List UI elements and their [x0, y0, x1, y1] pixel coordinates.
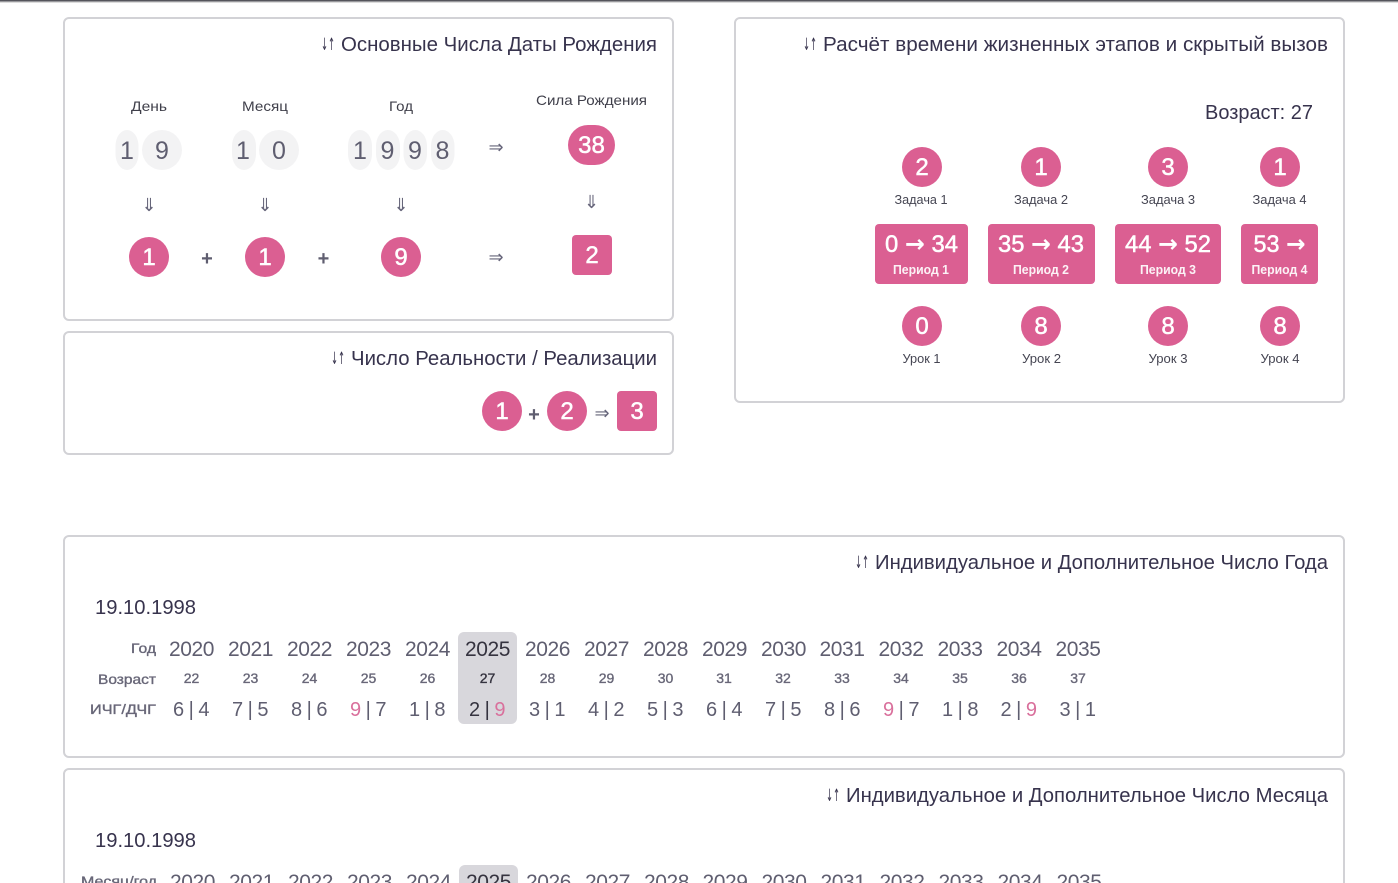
arrows: down: ⇓	[141, 195, 157, 216]
row: years: 2029	[702, 638, 747, 661]
row: years: 2034	[997, 638, 1042, 661]
row: years: 2025	[465, 638, 510, 661]
arrows: down: ⇓	[584, 192, 599, 213]
row: personal and additional year numbers: 6 | 4	[173, 699, 209, 721]
badge: result 3	[617, 391, 657, 431]
heading: basic birth date numbers: Основные Числа Даты Рождения	[341, 34, 657, 56]
badge: result 2	[572, 235, 612, 275]
row: years: 2021	[228, 638, 273, 661]
column labels: Сила Рождения	[536, 92, 647, 108]
row: years: 2024	[405, 638, 451, 661]
month digits: 0	[272, 137, 286, 165]
row: ages: 23	[243, 670, 258, 686]
badge: birth force 38: 38	[578, 132, 605, 159]
stage 3	[1115, 147, 1221, 366]
stage 3: Урок 3	[1148, 351, 1188, 366]
row: years: 2031	[820, 638, 864, 661]
panel: life stages and hidden challenge	[735, 18, 1344, 402]
year digits: 1	[353, 137, 367, 165]
row: ages: 35	[952, 670, 968, 686]
panel: basic birth date numbers	[64, 18, 673, 320]
row: ages: 30	[658, 670, 673, 686]
row: personal and additional year numbers: 3 | 1	[1059, 699, 1096, 721]
badge: birth force 38	[568, 125, 615, 165]
arrows: down: ⇓	[257, 195, 273, 216]
stage 1: Период 1	[893, 263, 949, 277]
row: personal and additional year numbers: 9 | 7	[350, 699, 386, 721]
year digits: 8	[436, 137, 449, 165]
arrows: down: ⇓	[393, 195, 409, 216]
badge: month reduced 1	[245, 237, 285, 277]
stage 2: Урок 2	[1022, 351, 1061, 366]
row: years: 2023	[346, 638, 391, 661]
column labels: Год	[389, 98, 413, 114]
stage 1: 2	[915, 154, 929, 181]
panel: reality number	[64, 332, 673, 454]
row: personal and additional year numbers: 7 | 5	[765, 699, 801, 721]
stage 3: 8	[1161, 313, 1175, 340]
stage 4: Задача 4	[1252, 192, 1306, 207]
heading: reality number: Число Реальности / Реализации	[351, 348, 657, 370]
heading: year number: Индивидуальное и Дополнительное Число Года	[875, 552, 1329, 574]
heading: life stages: ↓↑	[803, 35, 817, 55]
stage 2: Задача 2	[1014, 192, 1068, 207]
row: personal and additional year numbers: 4 | 2	[588, 699, 624, 721]
current year highlight	[459, 865, 518, 883]
heading: life stages: Расчёт времени жизненных этапов и скрытый вызов	[823, 34, 1328, 56]
row: ages	[184, 670, 1086, 686]
heading: month number: Индивидуальное и Дополнительное Число Месяца	[846, 785, 1329, 807]
day digits	[116, 130, 182, 170]
badge: result 3: 3	[630, 398, 644, 425]
year digits: 9	[408, 137, 422, 165]
stage 4	[1241, 147, 1318, 366]
stage 2: 35 → 43	[998, 230, 1084, 258]
month digits: 1	[236, 137, 250, 165]
row labels: Возраст	[98, 671, 157, 687]
stage 4: 1	[1273, 154, 1287, 181]
arrows: down	[141, 192, 599, 216]
day digits: 9	[155, 137, 169, 165]
row: ages: 26	[420, 670, 435, 686]
badge: day reduced 1: 1	[142, 244, 156, 271]
column labels: Месяц	[242, 98, 288, 114]
stage 3: 44 → 52	[1125, 230, 1211, 258]
row: personal and additional year numbers: 1 | 8	[942, 699, 978, 721]
heading: month number: ↓↑	[826, 786, 840, 806]
stage 4: 8	[1273, 313, 1287, 340]
column labels	[131, 92, 647, 114]
badge: year reduced 9	[381, 237, 421, 277]
arrow: to birth force: ⇒	[488, 137, 504, 158]
row: years: 2026	[525, 638, 570, 661]
row: personal and additional year numbers: 2 | 9	[469, 699, 505, 721]
stage 1	[875, 147, 968, 366]
row: personal and additional year numbers: 8 | 6	[291, 699, 327, 721]
stage 4: Период 4	[1252, 263, 1308, 277]
stage 2: 8	[1034, 313, 1048, 340]
badge: month reduced 1: 1	[258, 244, 272, 271]
row: personal and additional year numbers	[173, 699, 1096, 721]
row: ages: 31	[716, 670, 732, 686]
row: personal and additional year numbers: 3 | 1	[529, 699, 565, 721]
heading: year number: ↓↑	[855, 553, 869, 573]
row: personal and additional year numbers: 2 | 9	[1000, 699, 1037, 721]
row: personal and additional year numbers: 6 | 4	[706, 699, 742, 721]
badge: year reduced 9: 9	[394, 244, 408, 271]
row: ages: 32	[775, 670, 791, 686]
birth date: 19.10.1998	[95, 597, 196, 619]
column labels: День	[131, 98, 167, 114]
day digits: 1	[120, 137, 134, 165]
row: ages: 25	[361, 670, 376, 686]
row: years: 2027	[584, 638, 629, 661]
stage 2: Период 2	[1013, 263, 1069, 277]
row: personal and additional year numbers: 1 | 8	[409, 699, 445, 721]
stage 1: Урок 1	[902, 351, 940, 366]
badge: day reduced 1	[129, 237, 169, 277]
row: years: 2020	[169, 638, 214, 661]
row: years: 2028	[643, 638, 688, 661]
stage 4: Урок 4	[1260, 351, 1300, 366]
row: years: 2022	[287, 638, 332, 661]
row: ages: 27	[480, 670, 495, 686]
stage 1: 0 → 34	[885, 230, 958, 258]
heading: basic birth date numbers: ↓↑	[321, 35, 335, 55]
stage 2: 1	[1034, 154, 1048, 181]
row: personal and additional year numbers: 5 | 3	[647, 699, 683, 721]
badge: 2: 2	[560, 398, 574, 425]
row: years	[169, 638, 1100, 661]
panel: personal year number	[64, 536, 1344, 757]
row: personal and additional year numbers: 9 | 7	[883, 699, 919, 721]
age: Возраст: 27	[1205, 102, 1313, 124]
row labels: ИЧГ/ДЧГ	[90, 701, 156, 717]
row: ages: 24	[302, 670, 317, 686]
row: years: 2032	[879, 638, 923, 661]
birth date: 19.10.1998	[95, 830, 196, 852]
stage 2	[988, 147, 1095, 366]
row: years: 2033	[938, 638, 982, 661]
year digits	[348, 130, 454, 170]
stage 4: 53 →	[1254, 230, 1306, 258]
stage 1: 0	[915, 313, 929, 340]
badge: 1: 1	[495, 398, 509, 425]
row: years: 2030	[761, 638, 806, 661]
arrow: ⇒	[594, 403, 610, 424]
row: personal and additional year numbers: 7 | 5	[232, 699, 268, 721]
row: ages: 28	[540, 670, 555, 686]
row: ages: 22	[184, 670, 199, 686]
year digits: 9	[381, 137, 394, 165]
badge: 1	[482, 391, 522, 431]
row: ages: 37	[1070, 670, 1086, 686]
plus: +	[318, 248, 329, 270]
row: ages: 33	[834, 670, 850, 686]
row: years: 2035	[1056, 638, 1100, 661]
stage 3: 3	[1161, 154, 1175, 181]
row: years	[170, 871, 1101, 883]
stage 3: Период 3	[1140, 263, 1196, 277]
row labels: Год	[131, 640, 156, 656]
stage 1: Задача 1	[894, 192, 948, 207]
plus: +	[201, 248, 213, 270]
badge: result 2: 2	[585, 242, 599, 269]
plus: +	[528, 404, 540, 426]
stage 3: Задача 3	[1141, 192, 1195, 207]
row: personal and additional year numbers: 8 | 6	[824, 699, 860, 721]
heading: reality number: ↓↑	[331, 349, 345, 369]
row labels	[90, 640, 157, 717]
current year highlight	[458, 632, 517, 724]
panel: personal month number	[64, 769, 1344, 883]
month digits	[232, 130, 299, 170]
row: ages: 29	[599, 670, 614, 686]
badge: 2	[547, 391, 587, 431]
arrow: to result: ⇒	[488, 247, 504, 268]
row: ages: 34	[893, 670, 909, 686]
row: ages: 36	[1011, 670, 1027, 686]
